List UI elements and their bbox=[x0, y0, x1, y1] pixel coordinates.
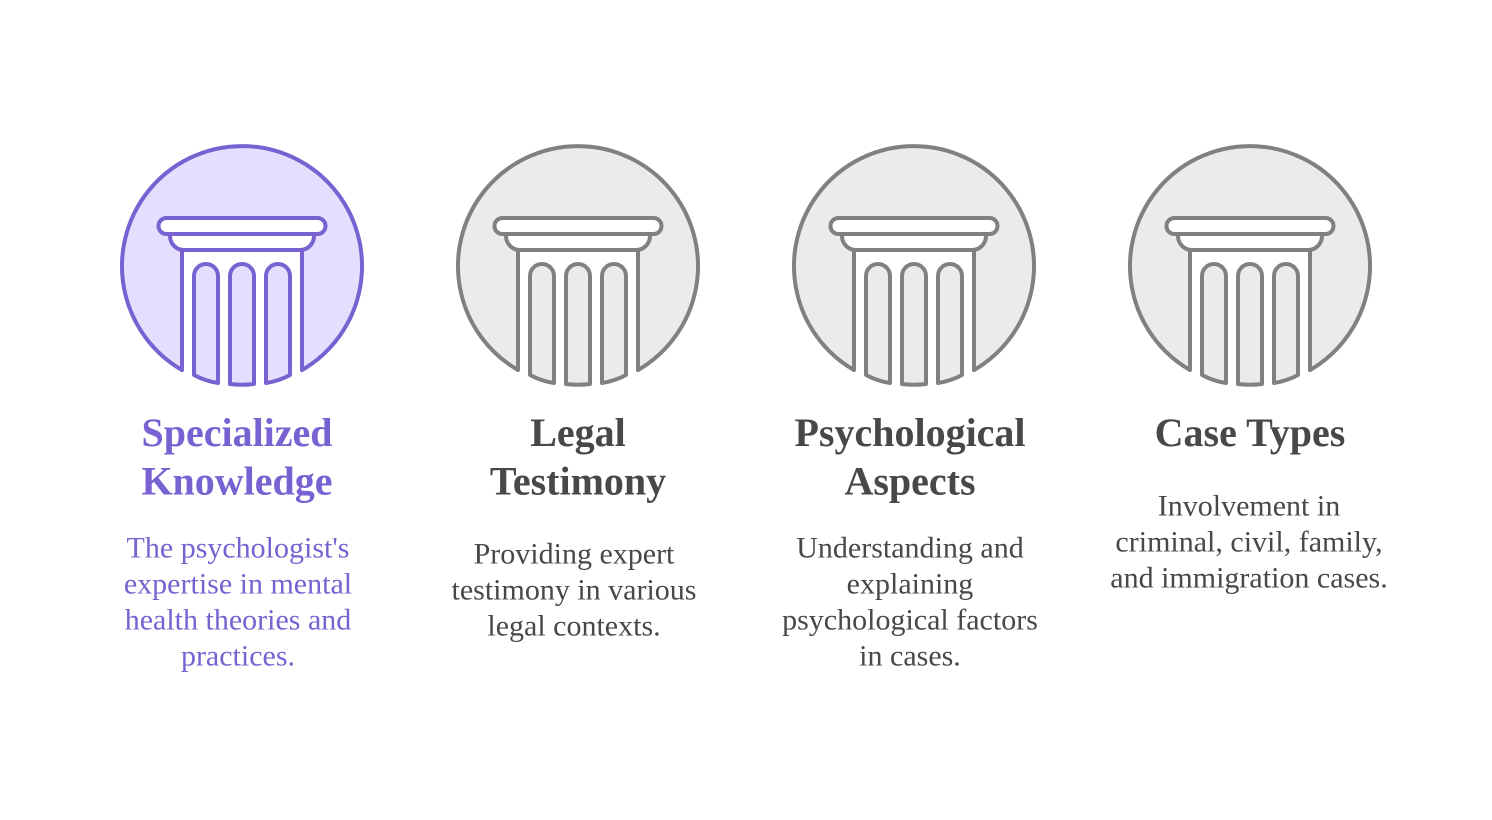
heading: Legal Testimony: Legal bbox=[530, 410, 626, 455]
heading: Psychological Aspects: Aspects bbox=[844, 458, 976, 504]
heading: Case Types: Case Types bbox=[1155, 410, 1345, 455]
icon: grey column in circle bbox=[1130, 146, 1370, 385]
panel: Case Types bbox=[1110, 146, 1388, 594]
icon: purple column in circle bbox=[122, 146, 362, 385]
text: Specialized Knowledge description: practices. bbox=[181, 640, 295, 672]
text: Case Types description: criminal, civil, family, bbox=[1115, 526, 1383, 558]
text: Specialized Knowledge description: expertise in mental bbox=[124, 568, 352, 600]
panel: Specialized Knowledge bbox=[122, 146, 362, 672]
text: Psychological Aspects description: explaining bbox=[847, 568, 973, 600]
text: Legal Testimony description: Providing expert bbox=[474, 538, 675, 570]
heading: Psychological Aspects: Psychological bbox=[794, 410, 1026, 455]
text: Legal Testimony description: legal contexts. bbox=[487, 610, 661, 642]
icon: grey column in circle bbox=[794, 146, 1034, 385]
text: Case Types description: and immigration cases. bbox=[1110, 562, 1388, 594]
text: Psychological Aspects description: in cases. bbox=[859, 640, 961, 672]
panel: Psychological Aspects bbox=[782, 146, 1038, 672]
text: Psychological Aspects description: Understanding and bbox=[796, 532, 1024, 564]
heading: Specialized Knowledge: Specialized bbox=[141, 410, 333, 455]
panel: Legal Testimony bbox=[452, 146, 698, 642]
heading: Legal Testimony: Testimony bbox=[490, 458, 666, 504]
text: Legal Testimony description: testimony in various bbox=[452, 574, 696, 606]
text: Specialized Knowledge description: The psychologist's bbox=[127, 532, 349, 564]
text: Psychological Aspects description: psychological factors bbox=[782, 604, 1038, 636]
icon: grey column in circle bbox=[458, 146, 698, 385]
text: Specialized Knowledge description: health theories and bbox=[125, 604, 351, 636]
heading: Specialized Knowledge: Knowledge bbox=[141, 458, 333, 504]
text: Case Types description: Involvement in bbox=[1158, 490, 1340, 522]
